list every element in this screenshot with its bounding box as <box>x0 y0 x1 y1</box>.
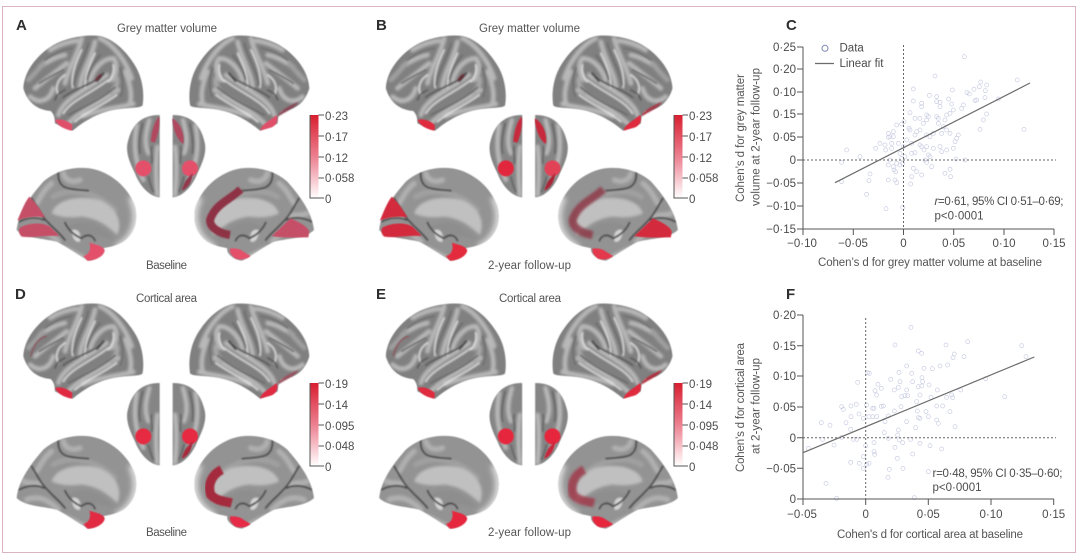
panel letter D: D <box>15 286 26 303</box>
y tick labels F: 0·20 <box>773 310 796 322</box>
x axis title F: Cohen's d for cortical area at baseline <box>837 529 1023 541</box>
y axis title C: volume at 2-year follow-up <box>750 68 762 206</box>
y tick labels C: 0·25 <box>773 42 796 54</box>
y tick labels F: 0 <box>790 494 796 506</box>
panel letter A: A <box>16 17 27 34</box>
y axis title F: Cohen’s d for cortical area <box>735 342 747 472</box>
panel letter F: F <box>786 286 795 303</box>
title B: Grey matter volume <box>479 23 580 35</box>
title A: Grey matter volume <box>117 23 217 35</box>
x tick labels F: 0 <box>862 509 869 521</box>
linear fit F <box>803 357 1034 453</box>
zero reference lines F <box>803 318 1056 499</box>
y tick labels C: −0·10 <box>766 201 796 213</box>
y axis title F: at 2-year follow-up <box>750 358 762 454</box>
caption D: Baseline <box>146 527 187 539</box>
colour bar E: 0 <box>689 462 695 474</box>
brain: ventral <box>127 383 205 465</box>
colour bar B: 0·17 <box>689 132 712 144</box>
colour bar D: 0·095 <box>325 421 354 433</box>
x tick labels C <box>787 238 1066 250</box>
caption E: 2-year follow-up <box>488 527 571 539</box>
y tick labels C: 0·20 <box>773 64 796 76</box>
y tick labels F: −0·05 <box>766 464 796 476</box>
panel A: grey matter volume baseline <box>16 17 354 272</box>
y tick labels F: 0·05 <box>773 402 796 414</box>
colour bar D: 0·19 <box>325 379 348 391</box>
colour bar D: 0·048 <box>325 441 354 453</box>
y axis title C <box>735 68 762 206</box>
brain: right lateral <box>189 36 309 131</box>
scatter points F <box>806 325 1028 500</box>
colour bar A: 0·23 <box>325 111 348 123</box>
scatter points C <box>840 55 1026 211</box>
x tick labels C: −0·10 <box>787 238 817 250</box>
brain: left lateral <box>386 36 506 131</box>
x tick labels C: 0·10 <box>992 238 1016 250</box>
colour bar E: 0·19 <box>689 379 712 391</box>
panel letter B: B <box>376 17 387 34</box>
colour bar E <box>674 379 718 474</box>
brain: right lateral <box>553 36 672 131</box>
colour bar A: 0·12 <box>325 153 348 165</box>
brain: left lateral <box>23 36 143 131</box>
brain: right medial <box>194 168 314 261</box>
y tick labels C: 0·15 <box>773 109 796 121</box>
colour bar B: 0·23 <box>689 111 712 123</box>
colour bar E: 0·095 <box>689 421 718 433</box>
brains A <box>17 36 314 261</box>
y tick labels C: 0 <box>790 155 796 167</box>
x tick labels F: −0·05 <box>787 509 817 521</box>
statistics F: r=0·48, 95% CI 0·35–0·60; <box>932 468 1062 480</box>
colour bar E: 0·048 <box>689 441 718 453</box>
title E: Cortical area <box>499 293 562 305</box>
y tick labels F: 0·15 <box>773 341 796 353</box>
brain: ventral <box>127 115 205 197</box>
brain: ventral <box>490 115 568 197</box>
panel B: grey matter volume follow-up <box>376 17 718 272</box>
colour bar E: 0·14 <box>689 400 713 412</box>
caption B: 2-year follow-up <box>488 260 571 272</box>
brain: left medial <box>17 436 137 529</box>
legend C: Data <box>840 42 864 54</box>
title D: Cortical area <box>136 293 198 305</box>
statistics C: r=0·61, 95% CI 0·51–0·69; <box>934 196 1064 208</box>
colour bar B <box>674 111 718 206</box>
brain: right lateral <box>189 304 309 399</box>
brain: right medial <box>194 436 314 529</box>
x tick labels C: −0·05 <box>838 238 868 250</box>
y tick labels C: −0·05 <box>766 178 796 190</box>
y tick labels C: −0·15 <box>766 224 796 236</box>
colour bar B: 0 <box>689 194 695 206</box>
brain: left lateral <box>23 304 143 399</box>
statistics C <box>934 196 1064 222</box>
caption A: Baseline <box>146 260 187 272</box>
brain: right medial <box>558 168 678 261</box>
brain: left medial <box>17 168 137 261</box>
y axis title C: Cohen’s d for grey matter <box>735 74 747 202</box>
x tick labels C: 0 <box>900 238 907 250</box>
y tick labels C: 0·10 <box>773 87 796 99</box>
colour bar D: 0 <box>325 462 331 474</box>
colour bar B: 0·12 <box>689 153 712 165</box>
x tick labels C: 0·15 <box>1042 238 1066 250</box>
statistics F: p<0·0001 <box>932 482 982 494</box>
panel letter E: E <box>376 286 386 303</box>
brains D <box>17 304 314 529</box>
statistics F <box>932 468 1062 494</box>
brain: right lateral <box>553 304 672 399</box>
y tick labels C: 0·05 <box>773 132 796 144</box>
colour bar A: 0·058 <box>325 173 354 185</box>
legend C: Linear fit <box>840 58 884 70</box>
x axis title C: Cohen’s d for grey matter volume at baseline <box>818 257 1042 269</box>
y tick labels F <box>766 310 796 506</box>
colour bar A: 0 <box>325 194 331 206</box>
colour bar D: 0·14 <box>325 400 349 412</box>
x tick labels F: 0·05 <box>917 509 940 521</box>
axes C <box>797 47 1054 235</box>
colour bar A: 0·17 <box>325 132 348 144</box>
brain: ventral <box>490 383 568 465</box>
panel F: cortical area scatter <box>735 286 1065 541</box>
brain: left lateral <box>386 304 506 399</box>
legend C <box>815 42 884 70</box>
brains B <box>379 36 678 261</box>
linear fit C <box>835 83 1030 183</box>
axes F <box>797 315 1054 505</box>
x tick labels C: 0·05 <box>942 238 965 250</box>
y axis title F <box>735 342 762 472</box>
statistics C: p<0·0001 <box>934 210 984 222</box>
zero reference lines C <box>803 45 1056 229</box>
brains E <box>379 304 678 529</box>
y tick labels C <box>766 42 796 236</box>
brain: right medial <box>558 436 678 529</box>
y tick labels F: 0·10 <box>773 371 796 383</box>
x tick labels F: 0·10 <box>979 509 1003 521</box>
panel D: cortical area baseline <box>15 286 354 539</box>
brain: left medial <box>379 168 499 261</box>
panel letter C: C <box>786 17 797 34</box>
x tick labels F: 0·15 <box>1042 509 1065 521</box>
colour bar D <box>310 379 354 474</box>
panel C: grey matter scatter <box>735 17 1066 269</box>
colour bar A <box>310 111 354 206</box>
x tick labels F <box>787 509 1065 521</box>
brain: left medial <box>379 436 499 529</box>
panel E: cortical area follow-up <box>376 286 718 539</box>
colour bar B: 0·058 <box>689 173 718 185</box>
y tick labels F: 0 <box>790 433 796 445</box>
